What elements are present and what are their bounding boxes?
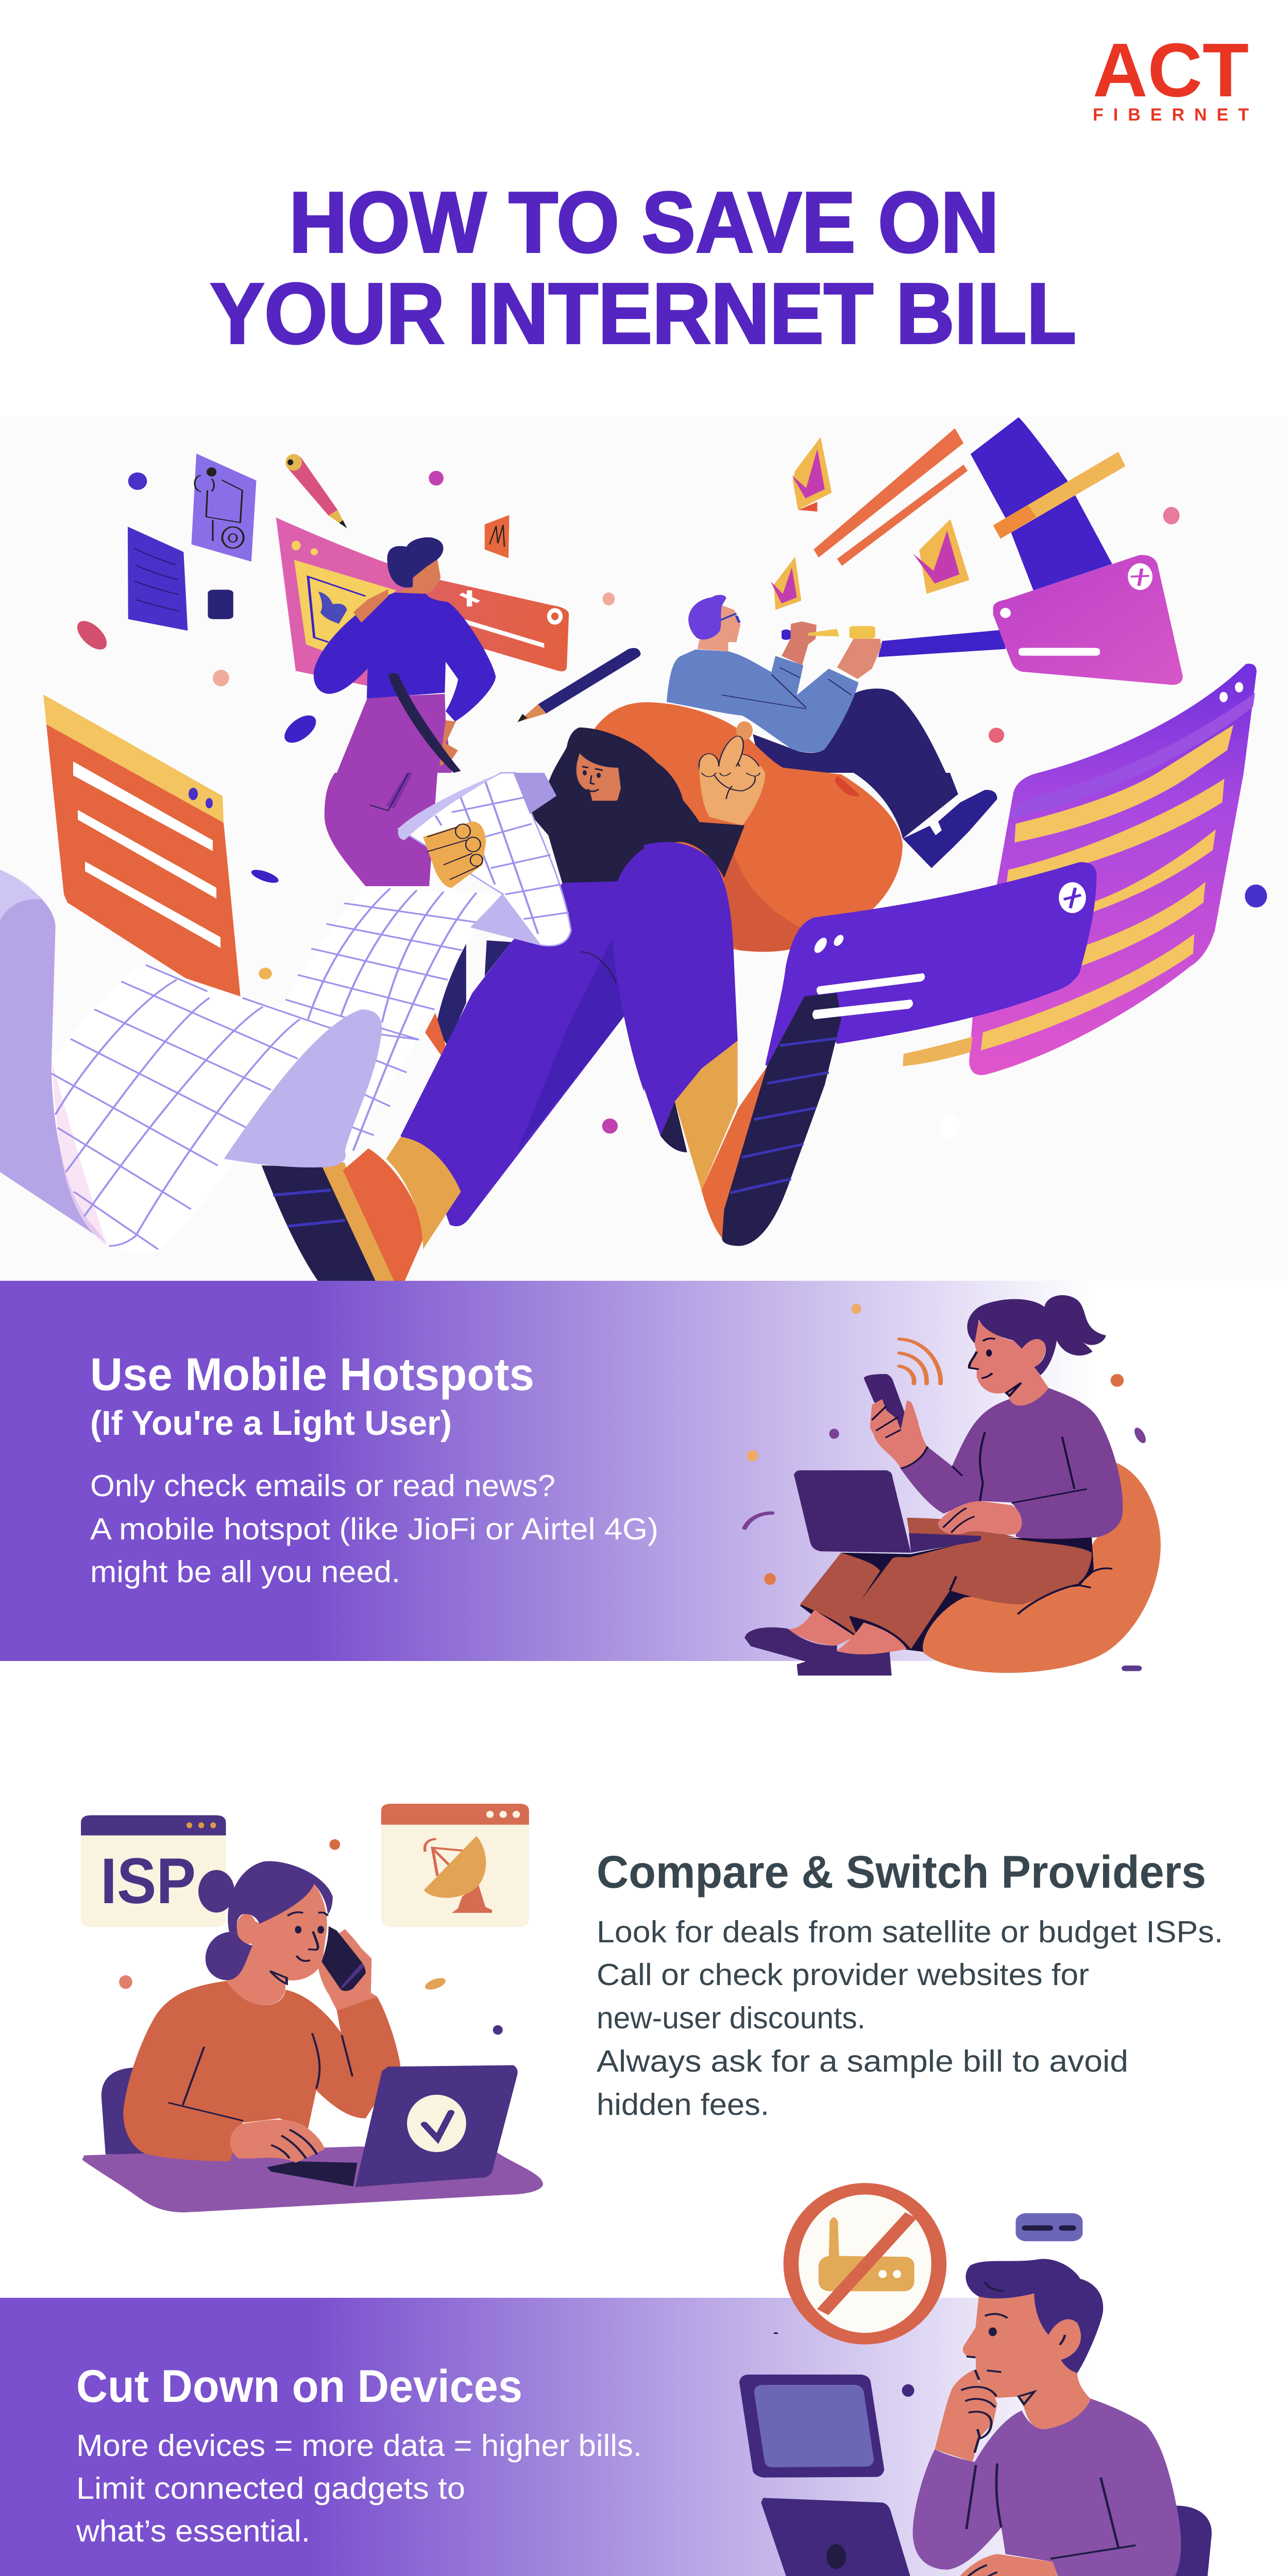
body text: compare: hidden fees. xyxy=(597,2088,769,2122)
subheading: light user: (If You're a Light User) xyxy=(90,1404,452,1443)
right floating shapes: bars, diamonds, magenta card xyxy=(771,417,1183,743)
title: HOW TO SAVE ON xyxy=(289,175,999,270)
body text: compare xyxy=(597,1915,1223,2122)
body text: devices xyxy=(76,2429,642,2548)
heading: compare and switch: Compare & Switch Providers xyxy=(597,1846,1206,1897)
icon: no router sign xyxy=(791,2189,939,2338)
panel: use mobile hotspots xyxy=(0,1281,1288,1661)
illustration: man thinking at laptop with blocked router xyxy=(739,2189,1214,2576)
heading: cut down on devices: Cut Down on Devices xyxy=(76,2360,522,2412)
woman: hair, face, torso and legs xyxy=(249,727,1097,1281)
body text: mobile hotspots: might be all you need. xyxy=(90,1555,400,1589)
man on beanbag with blue shirt xyxy=(667,595,997,868)
heading: use mobile hotspots: Use Mobile Hotspots xyxy=(90,1348,534,1400)
first man: back view, pants and shirt, with stylus xyxy=(314,537,641,886)
body text: devices: what’s essential. xyxy=(76,2514,310,2548)
grid paper roll with folds and hand xyxy=(0,773,571,1256)
magenta striped window, right xyxy=(903,664,1267,1075)
body text: mobile hotspots: A mobile hotspot (like JioFi or Airtel 4G) xyxy=(90,1512,658,1546)
body text: compare: new-user discounts. xyxy=(597,2001,866,2035)
body text: devices: More devices = more data = higher bills. xyxy=(76,2429,642,2463)
satellite dish window panel xyxy=(381,1804,529,1927)
body text: compare: Call or check provider websites for xyxy=(597,1958,1089,1992)
ISP window panel xyxy=(81,1815,226,1927)
beanbag, orange xyxy=(592,702,903,952)
ISP label: ISP xyxy=(100,1845,196,1917)
orange browser window with yellow header, left xyxy=(43,694,242,1014)
title xyxy=(210,175,1076,362)
body text: devices: Limit connected gadgets to xyxy=(76,2471,465,2505)
title: YOUR INTERNET BILL xyxy=(210,266,1076,362)
illustration: woman on beanbag with phone and laptop xyxy=(744,1295,1161,1675)
body text: mobile hotspots xyxy=(90,1469,658,1589)
illustration: woman on call at desk with ISP windows xyxy=(81,1804,543,2212)
text block: compare and switch providers xyxy=(597,1846,1223,2122)
pink browser window behind first man xyxy=(276,517,569,686)
body text: mobile hotspots: Only check emails or read news? xyxy=(90,1469,555,1503)
body text: compare: Always ask for a sample bill to avoid xyxy=(597,2044,1128,2078)
hero illustration panel xyxy=(0,416,1288,1281)
logo: ACT Fibernet: FIBERNET xyxy=(1093,105,1249,125)
logo: ACT Fibernet: ACT xyxy=(1093,28,1249,113)
floating documents and dots, left xyxy=(71,453,615,745)
body text: compare: Look for deals from satellite or budget ISPs. xyxy=(597,1915,1223,1949)
panel: cut down on devices xyxy=(0,2298,1288,2576)
